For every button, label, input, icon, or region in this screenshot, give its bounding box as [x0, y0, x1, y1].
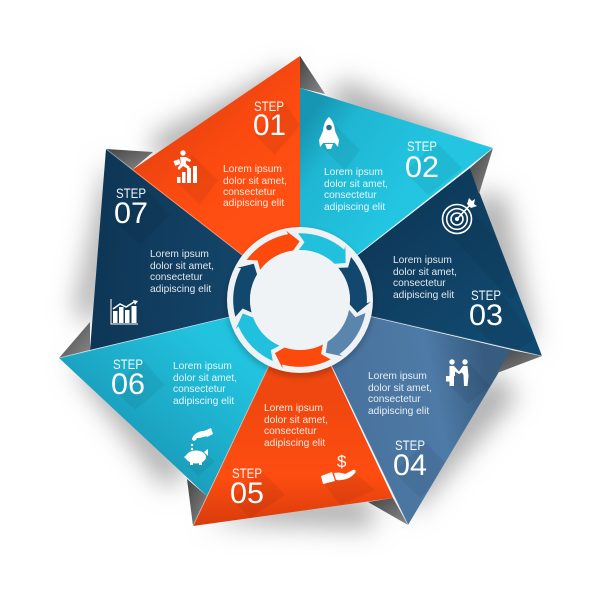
arrow 7 [228, 261, 261, 320]
text: step 4 body: Lorem ipsum [368, 371, 427, 382]
text: step 1 body: Lorem ipsum [223, 164, 282, 175]
panel: step 2 [300, 88, 493, 255]
text: step 5 body: dolor sit amet, [264, 415, 328, 426]
text: step 7 body: dolor sit amet, [150, 261, 214, 272]
step 7 long shadow [116, 190, 170, 245]
center ring [227, 227, 373, 373]
arrow 5 [275, 344, 331, 369]
text: step 3 body: adipiscing elit [393, 290, 454, 301]
text: step 2 body: adipiscing elit [324, 202, 385, 213]
folded corner flaps [59, 56, 542, 526]
arrow 6 [231, 309, 284, 366]
heading: step 1: STEP [254, 98, 284, 114]
segment 6 shape [59, 300, 300, 496]
text: step 5 body: adipiscing elit [264, 438, 325, 449]
arrow 4 [320, 304, 372, 362]
text: step 3 body: consectetur [393, 278, 446, 289]
ring shadow [226, 229, 374, 377]
text: step 1 body: dolor sit amet, [223, 176, 287, 187]
text: step 3 body: dolor sit amet, [393, 267, 457, 278]
text: step 5 body: consectetur [264, 426, 317, 437]
heading: step 5: 05 [230, 477, 264, 510]
text: step 2 body: consectetur [324, 190, 377, 201]
panel: step 5 [193, 366, 393, 526]
heading: step 6: 06 [111, 368, 145, 401]
center disc [250, 250, 350, 350]
heading: step 4: STEP [395, 437, 425, 453]
cast shadows from each segment edge [70, 66, 535, 528]
segment 5 shape [193, 300, 393, 526]
text: step 5 body: Lorem ipsum [264, 403, 323, 414]
segment 7 shape [90, 149, 300, 350]
step 2 long shadows [322, 125, 462, 195]
text: step 6 body: dolor sit amet, [173, 373, 237, 384]
text: step 3 body: Lorem ipsum [393, 255, 452, 266]
text: step 7 body: consectetur [150, 272, 203, 283]
arrow 2 [292, 226, 352, 270]
step 1 long shadows [177, 102, 300, 205]
text: step 2 body: dolor sit amet, [324, 179, 388, 190]
step 3 long shadows [446, 208, 535, 356]
heading: step 1: 01 [253, 109, 286, 142]
icon: growth chart [111, 299, 138, 324]
arrow 3 [336, 255, 372, 315]
text: step 6 body: consectetur [173, 384, 226, 395]
heading: step 2: STEP [407, 138, 437, 154]
segment 1 shape [132, 56, 300, 300]
icon: piggy bank and coin hand [184, 428, 213, 465]
panel: step 7 [90, 149, 242, 350]
text: step 4 body: consectetur [368, 394, 421, 405]
step 4 long shadows [394, 364, 479, 498]
arrow 1 [243, 227, 303, 273]
step 5 long shadows [232, 470, 375, 518]
panel: step 4 [332, 316, 512, 525]
heading: step 4: 04 [393, 449, 427, 482]
icon: target [442, 198, 477, 234]
heading: step 2: 02 [405, 151, 439, 184]
text: step 7 body: adipiscing elit [150, 284, 211, 295]
text: step 1 body: consectetur [223, 187, 276, 198]
text: step 4 body: adipiscing elit [368, 406, 429, 417]
panel: step 1 [132, 56, 300, 256]
text: step 7 body: Lorem ipsum [150, 249, 209, 260]
icon: runner on rising bars [173, 150, 197, 183]
panel: step 6 [59, 317, 269, 496]
text: step 6 body: adipiscing elit [173, 396, 234, 407]
panel: step 3 [358, 168, 542, 356]
icon: hand with dollar [321, 452, 356, 484]
segment edge highlights [59, 148, 542, 526]
heading: step 6: STEP [113, 356, 143, 372]
heading: step 5: STEP [232, 465, 262, 481]
step 6 long shadows [112, 360, 215, 476]
heading: step 7: STEP [116, 185, 146, 201]
segment 2 shape [300, 88, 493, 300]
text: step 6 body: Lorem ipsum [173, 361, 232, 372]
icon: rocket [319, 117, 339, 149]
text: step 4 body: dolor sit amet, [368, 383, 432, 394]
heading: step 3: STEP [471, 287, 501, 303]
text: step 1 body: adipiscing elit [223, 198, 284, 209]
text: step 2 body: Lorem ipsum [324, 167, 383, 178]
icon: handshake [446, 359, 468, 386]
segment 4 shape [300, 300, 512, 525]
cycle arrows [228, 226, 372, 369]
heading: step 3: 03 [469, 299, 503, 332]
icon: hand with dollar: $ [337, 452, 347, 471]
segment 3 shape [300, 168, 542, 356]
heading: step 7: 07 [114, 197, 148, 230]
